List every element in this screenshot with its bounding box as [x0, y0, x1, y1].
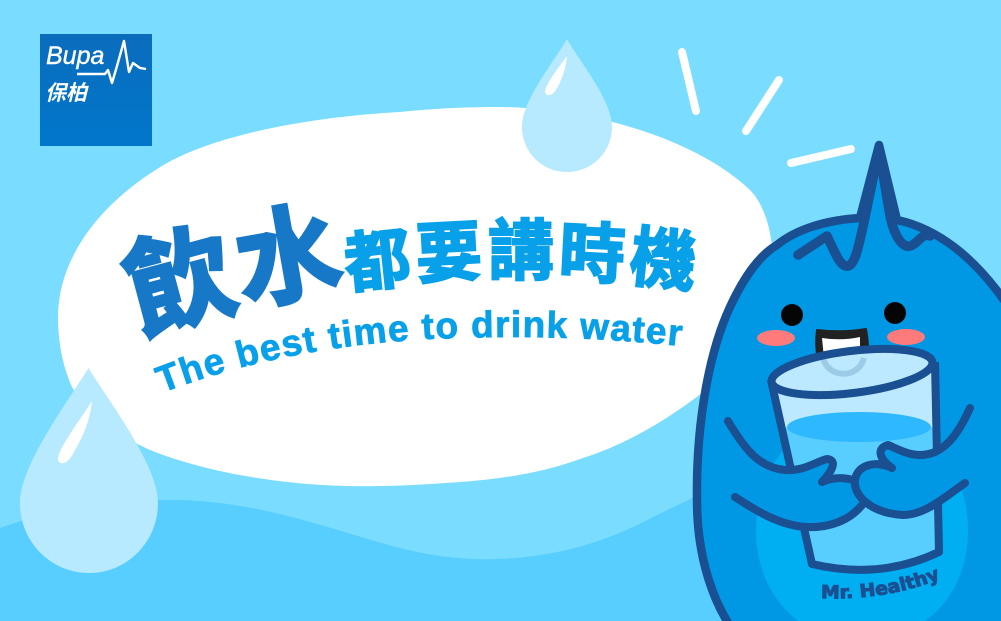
title: Chinese: 都 [341, 221, 414, 301]
body [697, 145, 1001, 621]
water drop: small [522, 39, 612, 172]
right arm [855, 408, 970, 515]
belly [756, 420, 968, 621]
glass [769, 341, 939, 570]
character: Mr. Healthy [692, 140, 1001, 621]
rays [682, 52, 851, 163]
name label: Mr. Healthy [822, 568, 938, 599]
title: Chinese: 講 [488, 214, 554, 288]
cheeks [757, 329, 925, 346]
title: Chinese: 時 [557, 215, 627, 293]
logo: Bupa: Bupa [46, 42, 104, 70]
mouth [816, 329, 868, 360]
background wave [0, 480, 1001, 621]
title: Chinese [113, 192, 700, 355]
hair [798, 150, 930, 266]
logo: Bupa: 保柏 [45, 82, 89, 105]
left arm [728, 421, 862, 527]
eyes [781, 302, 906, 326]
title: Chinese: 水 [227, 192, 350, 325]
white speech blob [58, 107, 773, 486]
logo: Bupa [40, 34, 152, 146]
title: Chinese: 要 [414, 214, 484, 292]
water drop: large [20, 368, 158, 573]
title: Chinese: 飲 [113, 210, 248, 355]
title: Chinese: 機 [627, 220, 700, 300]
subtitle: English: The best time to drink water [153, 310, 683, 390]
